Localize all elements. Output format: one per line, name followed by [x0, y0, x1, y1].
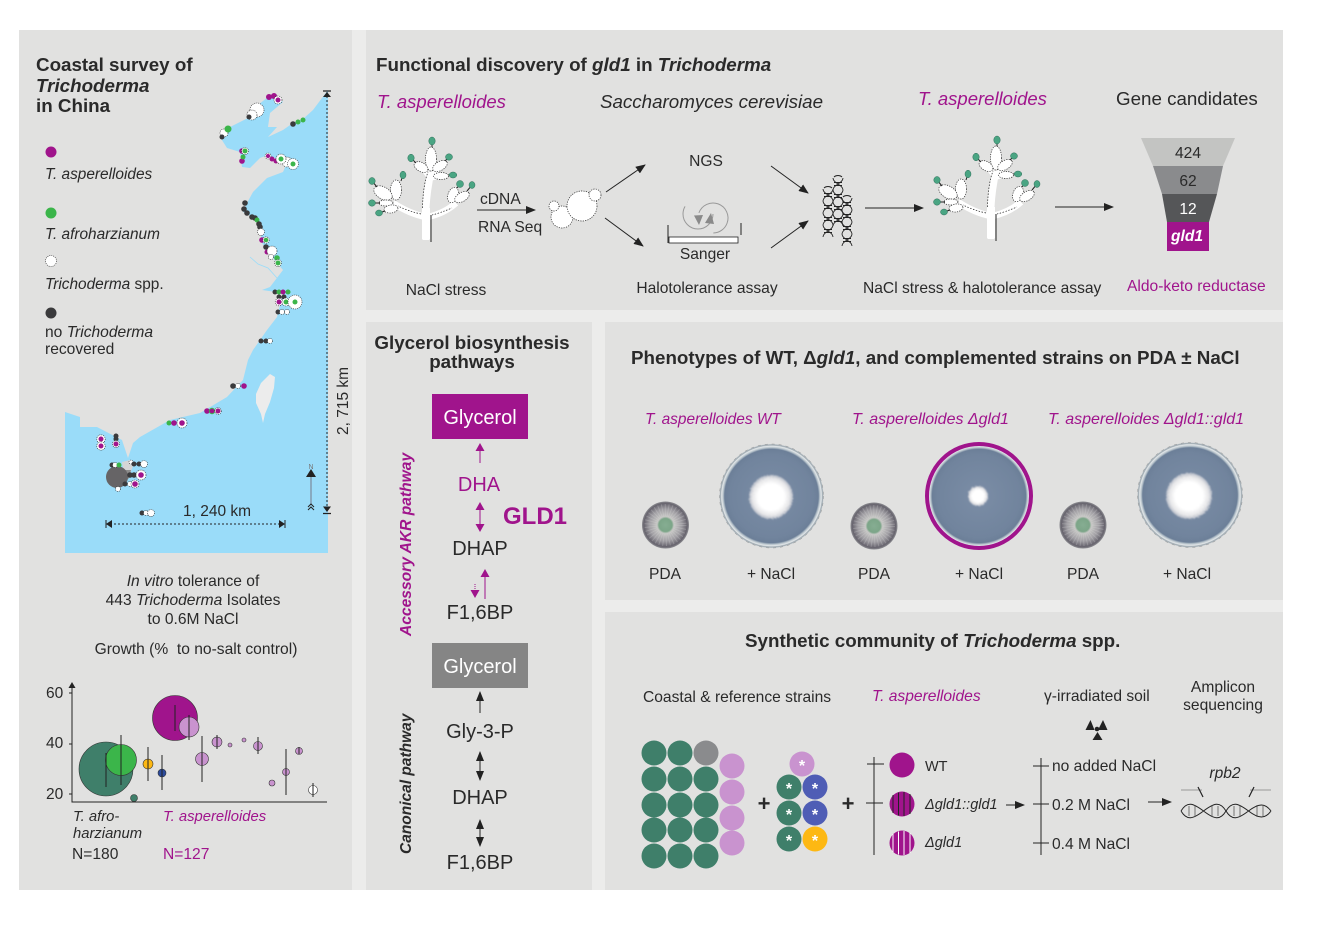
pathway: accessory steps: DHA [458, 474, 501, 496]
plus sign: + [758, 791, 770, 816]
icons: starred strains [776, 752, 828, 852]
funnel: gene candidates [1141, 138, 1235, 251]
icon: north arrow: N [308, 464, 314, 471]
heading: Gene candidates: Gene candidates [1116, 88, 1258, 109]
title: glycerol pathways: Glycerol biosynthesis [374, 332, 570, 353]
pathway: canonical steps: Gly-3-P [446, 721, 514, 743]
funnel: gene candidates: 424 [1175, 145, 1201, 162]
plates: complemented: PDA [1067, 566, 1100, 583]
label: accessory pathway: Accessory AKR pathway [398, 452, 415, 637]
arrow: to soil [1006, 804, 1024, 806]
panel: functional discovery [366, 30, 1283, 310]
panel: phenotypes [605, 322, 1283, 600]
chart: growth bubble plot: T. afro- [73, 809, 119, 825]
title: glycerol pathways: pathways [429, 351, 515, 372]
treatments: NaCl levels: 0.4 M NaCl [1052, 836, 1130, 853]
icon: amplicon DNA [1181, 787, 1271, 818]
plates: knockout [850, 444, 1031, 583]
scale: east-west distance [106, 503, 285, 528]
label: rpb2: rpb2 [1209, 765, 1241, 782]
heading: amplicon sequencing: sequencing [1183, 697, 1263, 714]
text: growth axis title: Growth (% to no-salt control) [95, 641, 297, 658]
label: Sanger: Sanger [680, 246, 730, 263]
icons: strain circles [642, 740, 744, 868]
title: coastal survey: Coastal survey of [36, 54, 193, 75]
pathway: accessory steps: GLD1 [503, 503, 567, 530]
heading: T. asperelloides: T. asperelloides [872, 688, 981, 705]
arrow: cDNA / RNA Seq: RNA Seq [478, 219, 542, 236]
box: glycerol accessory: Glycerol [443, 407, 517, 429]
label: complemented: T. asperelloides Δgld1::gld1 [1048, 411, 1244, 428]
map: Hainan [106, 460, 133, 488]
treatments: NaCl levels: no added NaCl [1052, 758, 1156, 775]
text: in vitro tolerance: In vitro tolerance of [127, 573, 259, 590]
arrows: yeast to NGS and Sanger [605, 165, 645, 246]
map: ocean and China coast [65, 90, 328, 553]
scale: north-south distance [323, 91, 352, 514]
text: in vitro tolerance: to 0.6M NaCl [148, 611, 238, 628]
icon: yeast cells [549, 189, 601, 228]
chart: growth bubble plot: 20 [46, 786, 64, 803]
heading: T. asperelloides: T. asperelloides [377, 91, 506, 112]
label: Halotolerance assay: Halotolerance assay [636, 280, 778, 297]
heading: amplicon sequencing: Amplicon [1191, 679, 1255, 696]
label: NaCl stress: NaCl stress [406, 282, 486, 299]
heading: coastal and reference: Coastal & reference strains [643, 689, 831, 706]
heading: Saccharomyces cerevisiae: Saccharomyces cerevisiae [600, 91, 823, 112]
plates: knockout: PDA [858, 566, 891, 583]
arrow: to sequencing [1148, 801, 1171, 803]
chart: growth bubble plot [46, 682, 327, 863]
icon: radiation [1086, 720, 1108, 740]
label: NGS: NGS [689, 153, 723, 170]
legend: strain treatments: Δgld1::gld1 [924, 797, 998, 813]
box: glycerol canonical: Glycerol [443, 656, 517, 678]
pathway: canonical steps: F1,6BP [447, 852, 513, 874]
label: canonical pathway: Canonical pathway [398, 712, 415, 854]
arrow: cDNA / RNA Seq: cDNA [480, 191, 521, 208]
icon: Sanger gel [668, 199, 741, 243]
title: phenotypes: Phenotypes of WT, Δgld1, and complemented strains on PDA ± NaCl [631, 347, 1240, 368]
chart: growth bubble plot: T. asperelloides [163, 809, 267, 825]
panel: glycerol pathways [366, 322, 592, 890]
label: WT: T. asperelloides WT [645, 411, 782, 428]
plates: WT: + NaCl [747, 566, 795, 583]
arrow: cDNA / RNA Seq [477, 191, 542, 236]
icon: DNA helices [823, 176, 852, 246]
title: coastal survey: Trichoderma [36, 75, 149, 96]
treatments: NaCl levels: 0.2 M NaCl [1052, 797, 1130, 814]
plates: WT: PDA [649, 566, 682, 583]
legend: strain treatments [866, 752, 998, 856]
icons: starred strains: * [812, 781, 819, 798]
legend: strain treatments: Δgld1 [924, 835, 962, 851]
legend: species [45, 146, 164, 358]
funnel: gene candidates: gld1 [1170, 228, 1203, 245]
chart: growth bubble plot: 40 [46, 735, 64, 752]
icons: starred strains: * [799, 758, 806, 775]
box: glycerol accessory [432, 394, 528, 439]
map: Taiwan [256, 374, 275, 423]
chart: growth bubble plot: N=127 [163, 846, 209, 863]
funnel: gene candidates: 62 [1179, 173, 1197, 190]
scale: east-west distance: 1, 240 km [183, 503, 251, 520]
text: in vitro tolerance: 443 Trichoderma Isolates [106, 592, 280, 609]
icons: starred strains: * [812, 833, 819, 850]
chart: growth bubble plot: harzianum [73, 826, 142, 842]
pathway: accessory steps [447, 444, 567, 624]
plus sign 2: + [842, 791, 854, 816]
plates: WT [642, 444, 824, 583]
arrows: into DNA [771, 166, 808, 248]
chart: growth bubble plot: 60 [46, 685, 64, 702]
map: sampling sites [97, 93, 306, 516]
pathway: accessory steps: DHAP [452, 538, 508, 560]
legend: species: no Trichoderma [45, 324, 153, 341]
box: glycerol canonical [432, 643, 528, 688]
icon: north arrow [306, 464, 316, 510]
pathway: canonical steps [446, 692, 514, 874]
icons: starred strains: * [812, 807, 819, 824]
arrow: DNA to fungus [865, 207, 923, 209]
label: NaCl stress and halotolerance: NaCl stress & halotolerance assay [863, 280, 1102, 297]
legend: species: T. afroharzianum [45, 226, 160, 243]
plates: complemented [1060, 442, 1242, 583]
chart: growth bubble plot: N=180 [72, 846, 119, 863]
plates: complemented: + NaCl [1163, 566, 1211, 583]
icon: fungus tree [368, 137, 475, 242]
label: Aldo-keto reductase: Aldo-keto reductase [1127, 278, 1266, 295]
legend: species: Trichoderma spp. [45, 276, 164, 293]
title: functional discovery: Functional discovery of gld1 in Trichoderma [376, 54, 771, 75]
heading: T. asperelloides 2: T. asperelloides [918, 88, 1047, 109]
title: synthetic community: Synthetic community of Trichoderma spp. [745, 630, 1120, 651]
icon: fungus tree 2 [934, 136, 1040, 241]
pathway: canonical steps: DHAP [452, 787, 508, 809]
funnel: gene candidates: 12 [1179, 201, 1197, 218]
legend: species: recovered [45, 341, 114, 358]
label: knockout: T. asperelloides Δgld1 [852, 411, 1009, 428]
scale: north-south distance: 2, 715 km [335, 367, 352, 435]
legend: strain treatments: WT [925, 759, 948, 775]
icons: starred strains: * [786, 781, 793, 798]
icons: starred strains: * [786, 833, 793, 850]
pathway: accessory steps: F1,6BP [447, 602, 513, 624]
title: coastal survey: in China [36, 95, 111, 116]
plates: knockout: + NaCl [955, 566, 1003, 583]
icons: starred strains: * [786, 807, 793, 824]
heading: irradiated soil: γ-irradiated soil [1044, 688, 1150, 705]
panel: coastal survey [19, 30, 352, 890]
legend: species: T. asperelloides [45, 166, 153, 183]
arrow: to funnel [1055, 206, 1113, 208]
panel: synthetic community [605, 612, 1283, 890]
treatments: NaCl levels [1033, 758, 1156, 855]
